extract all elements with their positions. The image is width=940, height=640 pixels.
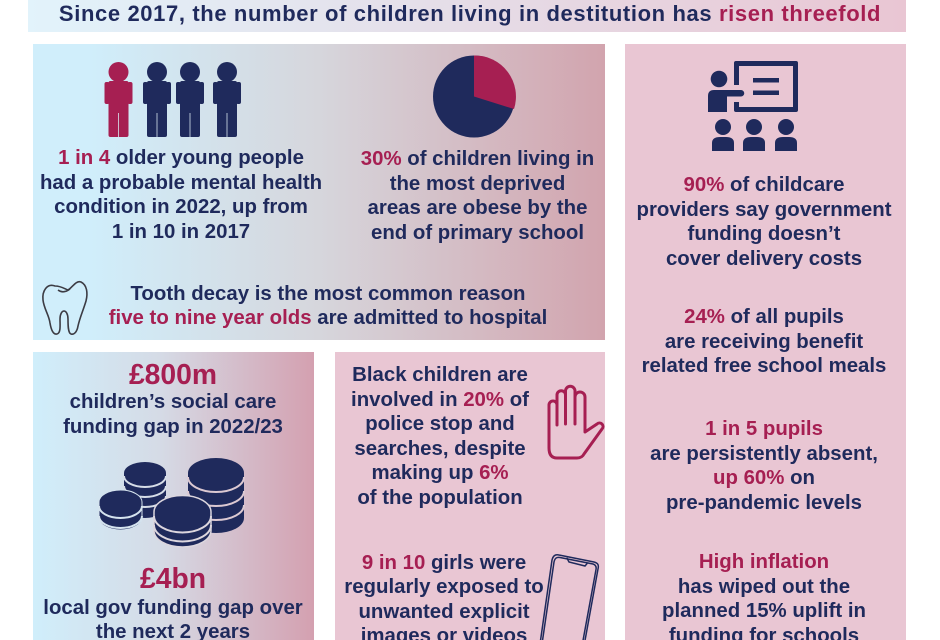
headline: Since 2017, the number of children living in destitution has risen threefold <box>59 1 881 26</box>
front left stack <box>99 490 142 530</box>
text: mental health statistic <box>40 147 322 242</box>
text: obesity statistic <box>361 148 594 244</box>
text: local government label <box>43 596 303 640</box>
icon: smartphone <box>540 554 600 640</box>
text: free school meals statistic: are receiving benefit <box>665 330 863 352</box>
text: obesity statistic: 30% of children living in <box>361 148 594 170</box>
text: obesity statistic: the most deprived <box>390 172 565 194</box>
text: explicit images statistic <box>344 552 544 640</box>
text: absence statistic <box>650 418 878 514</box>
text: explicit images statistic: unwanted explicit <box>358 600 530 622</box>
text: tooth decay statistic <box>109 282 547 329</box>
icon: tooth <box>42 280 88 335</box>
text: inflation statistic <box>662 551 866 640</box>
text: social care label <box>63 391 283 438</box>
text: absence statistic: 1 in 5 pupils <box>705 418 823 440</box>
icon: teacher and pupils <box>708 61 798 151</box>
text: obesity statistic: areas are obese by the <box>368 197 587 219</box>
text: stop and search statistic: involved in 20% of <box>351 388 529 410</box>
icon: four people, one highlighted <box>104 62 241 137</box>
text: mental health statistic: had a probable mental health <box>40 172 322 194</box>
text: childcare funding statistic: providers say government <box>637 198 891 220</box>
text: inflation statistic: High inflation <box>699 551 829 573</box>
front centre stack <box>154 496 211 547</box>
text: absence statistic: up 60% on <box>713 467 815 489</box>
text: stop and search statistic: making up 6% <box>371 462 509 484</box>
text: inflation statistic: has wiped out the <box>678 576 850 598</box>
icon: raised hand <box>548 384 604 460</box>
text: childcare funding statistic <box>637 174 892 270</box>
stat: social care funding gap: £800m <box>129 358 217 390</box>
text: stop and search statistic: of the population <box>357 486 523 508</box>
text: explicit images statistic: regularly exposed to <box>344 576 544 598</box>
text: stop and search statistic: Black children are <box>352 364 528 386</box>
panel: health <box>33 44 605 340</box>
back left stack <box>124 462 166 518</box>
text: explicit images statistic: 9 in 10 girls were <box>362 552 526 574</box>
text: stop and search statistic: police stop and <box>365 413 515 435</box>
text: childcare funding statistic: 90% of childcare <box>684 174 844 196</box>
text: obesity statistic: end of primary school <box>371 222 584 244</box>
text: stop and search statistic <box>351 364 529 508</box>
panel: safety <box>335 352 605 640</box>
text: stop and search statistic: searches, despite <box>354 438 526 460</box>
text: social care label: children’s social care <box>70 391 276 413</box>
text: local government label: local gov funding gap over <box>43 596 303 618</box>
text: childcare funding statistic: cover delivery costs <box>666 248 862 270</box>
text: inflation statistic: planned 15% uplift in <box>662 600 866 622</box>
text: social care label: funding gap in 2022/23 <box>63 416 283 438</box>
text: mental health statistic: 1 in 4 older young people <box>58 147 304 169</box>
stat: local government funding gap: £4bn <box>140 562 206 594</box>
panel: headline banner <box>28 0 906 32</box>
back right stack <box>188 458 244 533</box>
text: absence statistic: pre-pandemic levels <box>666 492 862 514</box>
text: tooth decay statistic: Tooth decay is the most common reason <box>130 282 526 304</box>
panel: education <box>625 44 906 640</box>
text: free school meals statistic: related free school meals <box>642 355 886 377</box>
text: absence statistic: are persistently absent, <box>650 442 878 464</box>
text: free school meals statistic <box>642 306 886 377</box>
text: childcare funding statistic: funding doesn’t <box>688 223 840 245</box>
chart: obesity pie <box>433 56 516 138</box>
text: tooth decay statistic: five to nine year olds are admitted to hospital <box>109 307 547 329</box>
panel: funding gaps <box>33 352 314 640</box>
icon: coin stacks <box>100 458 245 546</box>
text: mental health statistic: condition in 2022, up from <box>54 196 308 218</box>
text: free school meals statistic: 24% of all pupils <box>684 306 844 328</box>
text: mental health statistic: 1 in 10 in 2017 <box>112 220 250 242</box>
